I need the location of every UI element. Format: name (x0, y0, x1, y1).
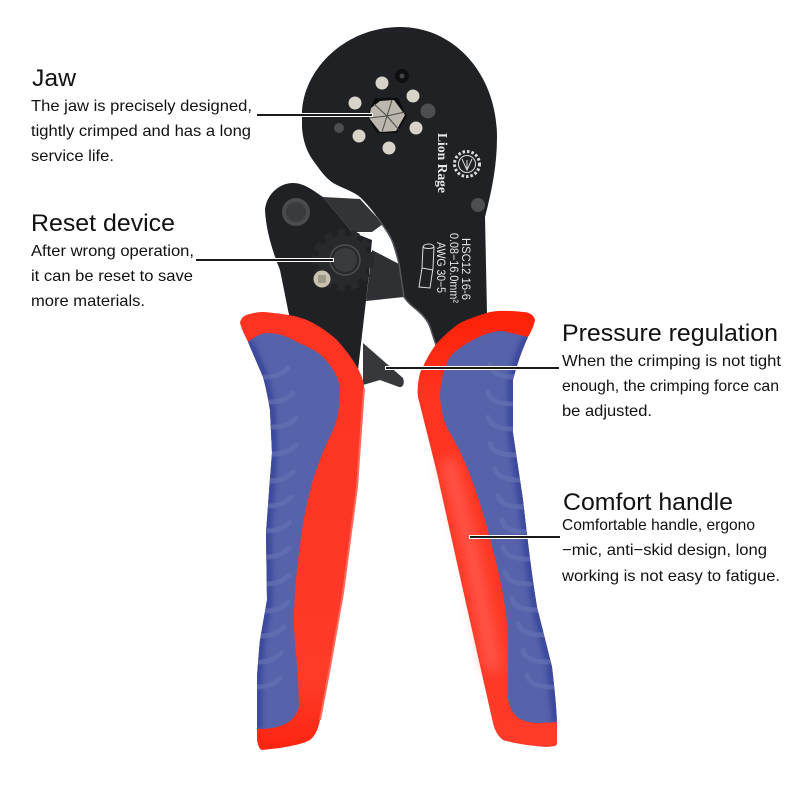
model text: HSC12 16-6 (459, 238, 473, 300)
jaw leader line (257, 113, 373, 117)
jaw edge highlight (377, 217, 436, 345)
right handle highlight (448, 460, 494, 670)
comfort description: working is not easy to fatigue. (561, 568, 780, 585)
pivot bolt (282, 198, 310, 226)
reset leader line (196, 258, 334, 262)
die pins (348, 76, 422, 154)
jaw description (31, 98, 252, 165)
pressure heading: Pressure regulation (562, 320, 778, 347)
reset gear (315, 232, 371, 288)
model text (434, 233, 473, 303)
left handle bright edge (320, 388, 364, 720)
grip ribs (257, 368, 296, 687)
rear dark plate (323, 197, 404, 387)
brand name: Lion Rage (434, 133, 449, 193)
crimping die (367, 98, 407, 133)
callout: pressure regulation (385, 320, 782, 420)
callout: comfort handle (469, 489, 780, 585)
comfort leader line (469, 535, 560, 539)
ferrule icon (419, 244, 434, 288)
comfort description (561, 517, 780, 585)
left handle red grip (240, 312, 364, 750)
model text: AWG 30−5 (434, 242, 448, 293)
pressure description (562, 353, 782, 420)
reset description: it can be reset to save (31, 268, 193, 285)
jaw heading: Jaw (32, 65, 77, 92)
right handle blue grip (435, 325, 560, 730)
crimping tool (240, 27, 560, 750)
jaw description: service life. (31, 148, 114, 165)
brand logo gear (454, 152, 480, 176)
callout: jaw (31, 65, 373, 165)
pressure description: enough, the crimping force can (562, 378, 779, 395)
left arm (265, 183, 372, 370)
small screws (334, 69, 485, 212)
reset heading: Reset device (31, 210, 175, 237)
model text: 0.08−16.0mm² (447, 233, 461, 303)
grip ribs (488, 365, 552, 687)
reset description: more materials. (31, 293, 145, 310)
jaw head and right arm (302, 27, 497, 360)
comfort description: Comfortable handle, ergono (562, 517, 755, 534)
jaw description: tightly crimped and has a long (31, 123, 251, 140)
comfort heading: Comfort handle (563, 489, 733, 516)
comfort description: −mic, anti−skid design, long (562, 542, 767, 559)
brass adjusting screw (314, 270, 330, 288)
pressure description: When the crimping is not tight (562, 353, 782, 370)
reset description: After wrong operation, (31, 243, 194, 260)
left handle (240, 312, 364, 750)
callout: reset device (31, 210, 334, 310)
pressure leader line (385, 366, 559, 370)
jaw description: The jaw is precisely designed, (31, 98, 252, 115)
left handle blue grip (248, 333, 340, 729)
right handle (418, 311, 560, 747)
right handle red grip (418, 311, 557, 747)
pressure description: be adjusted. (562, 403, 652, 420)
reset description (31, 243, 194, 310)
